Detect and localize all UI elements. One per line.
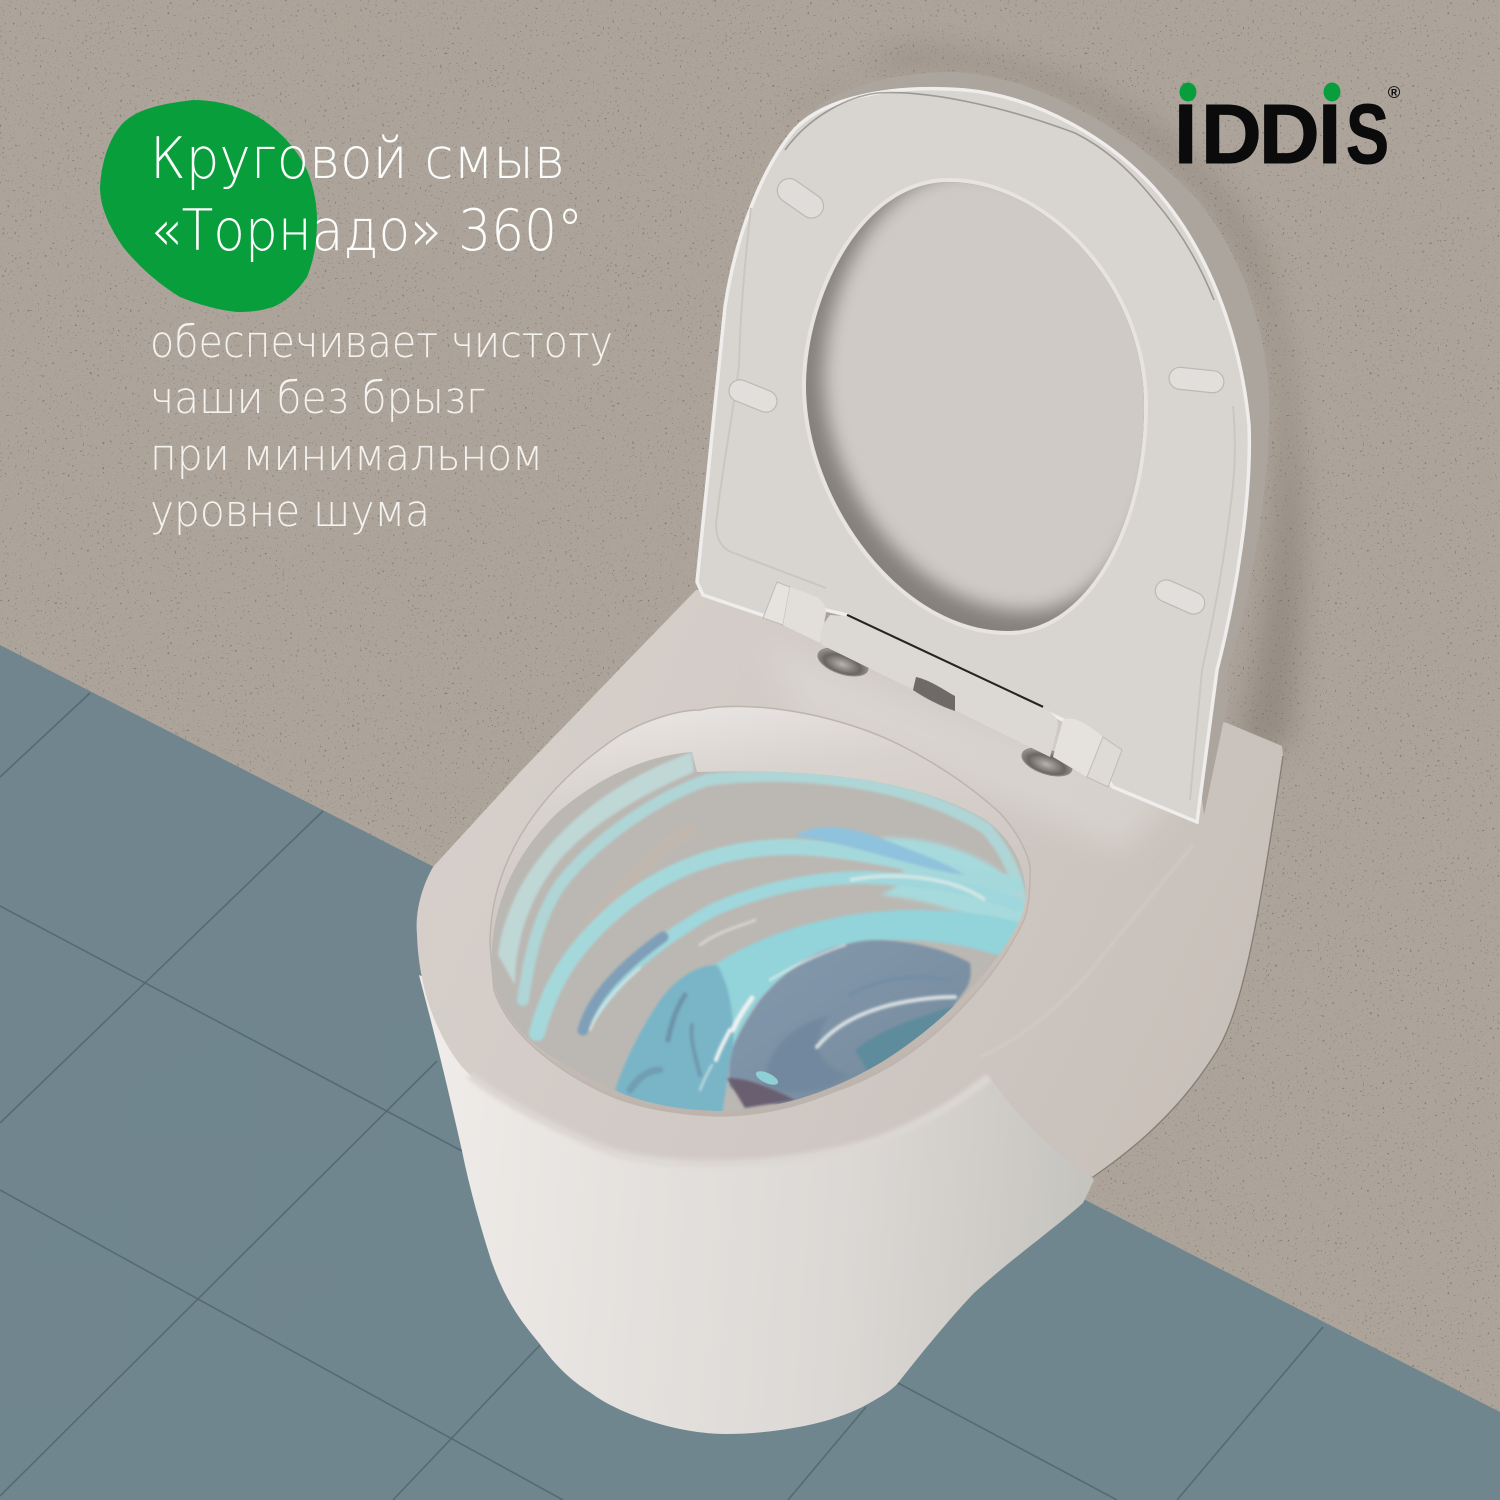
dark gap under outer lip (785, 93, 1214, 300)
reddish depth accent (727, 1078, 795, 1108)
pale foam top right (850, 876, 985, 900)
soft shadow of lid on wall (790, 50, 1302, 760)
flange crease (980, 845, 1193, 1057)
description text: обеспечивает чистоту (150, 317, 613, 368)
blue water lower left (615, 965, 733, 1115)
gap behind hinge bar (847, 615, 1043, 707)
brand logo: S (1346, 87, 1389, 181)
turquoise wash right (882, 836, 1026, 934)
chrome bolt right (1019, 743, 1075, 781)
pale streak top (523, 776, 1020, 1000)
wall-side dark contact line (1093, 756, 1283, 1177)
chrome bolt left (815, 643, 871, 681)
tiled floor (0, 645, 1500, 1500)
right hinge (1053, 719, 1103, 777)
green accent blob (100, 100, 317, 312)
toilet seat lid (open) (697, 72, 1269, 822)
turquoise streak middle (537, 847, 1015, 1033)
broad turquoise band (714, 908, 1018, 1048)
bumper right (1168, 366, 1225, 394)
chrome clip in hinge bar (913, 677, 955, 711)
light reflection on deck (760, 640, 1180, 850)
bumper top left (773, 174, 828, 223)
inner bowl wall (490, 706, 1030, 1116)
rim lower soft edge (470, 1075, 989, 1164)
vortex inner shadow (768, 1018, 834, 1090)
right hinge clip (1087, 737, 1122, 787)
bumper left (726, 376, 780, 416)
description text (150, 317, 613, 537)
brand logo: IDDI (1174, 87, 1341, 181)
title: Круговой смыв (150, 126, 565, 192)
blue streak left (583, 937, 663, 1030)
blue glint top right (795, 827, 965, 875)
bumper bottom right (1152, 576, 1208, 618)
left hinge (783, 587, 826, 643)
description text: уровне шума (150, 486, 430, 537)
dark vortex (729, 940, 971, 1105)
title: «Торнадо» 360° (150, 198, 583, 264)
seat opening rim (806, 182, 1144, 631)
vortex teal pool (855, 1005, 955, 1075)
swirling water (492, 752, 1026, 1111)
toilet bowl exterior (419, 975, 1094, 1434)
description text: чаши без брызг (150, 373, 486, 424)
rim highlight (610, 1152, 677, 1163)
beige tint streak (560, 830, 690, 980)
lid outer grey edge (795, 72, 1269, 815)
turquoise streak lower (590, 877, 1018, 1017)
cyan droplet (756, 1071, 778, 1085)
streaks in water (630, 977, 950, 1090)
inner shadow of seat opening (790, 170, 1162, 640)
seat recess edge (716, 208, 1235, 800)
pale crescent upper left (498, 752, 694, 985)
foam highlights (700, 920, 955, 1090)
lid front face (697, 89, 1249, 822)
ceramic deck, rim and wall flange (417, 590, 1283, 1177)
title (150, 126, 583, 264)
left hinge clip (763, 582, 790, 625)
brand logo: ® (1388, 83, 1401, 102)
description text: при минимальном (150, 430, 543, 481)
hinge cover bar (820, 615, 1058, 757)
